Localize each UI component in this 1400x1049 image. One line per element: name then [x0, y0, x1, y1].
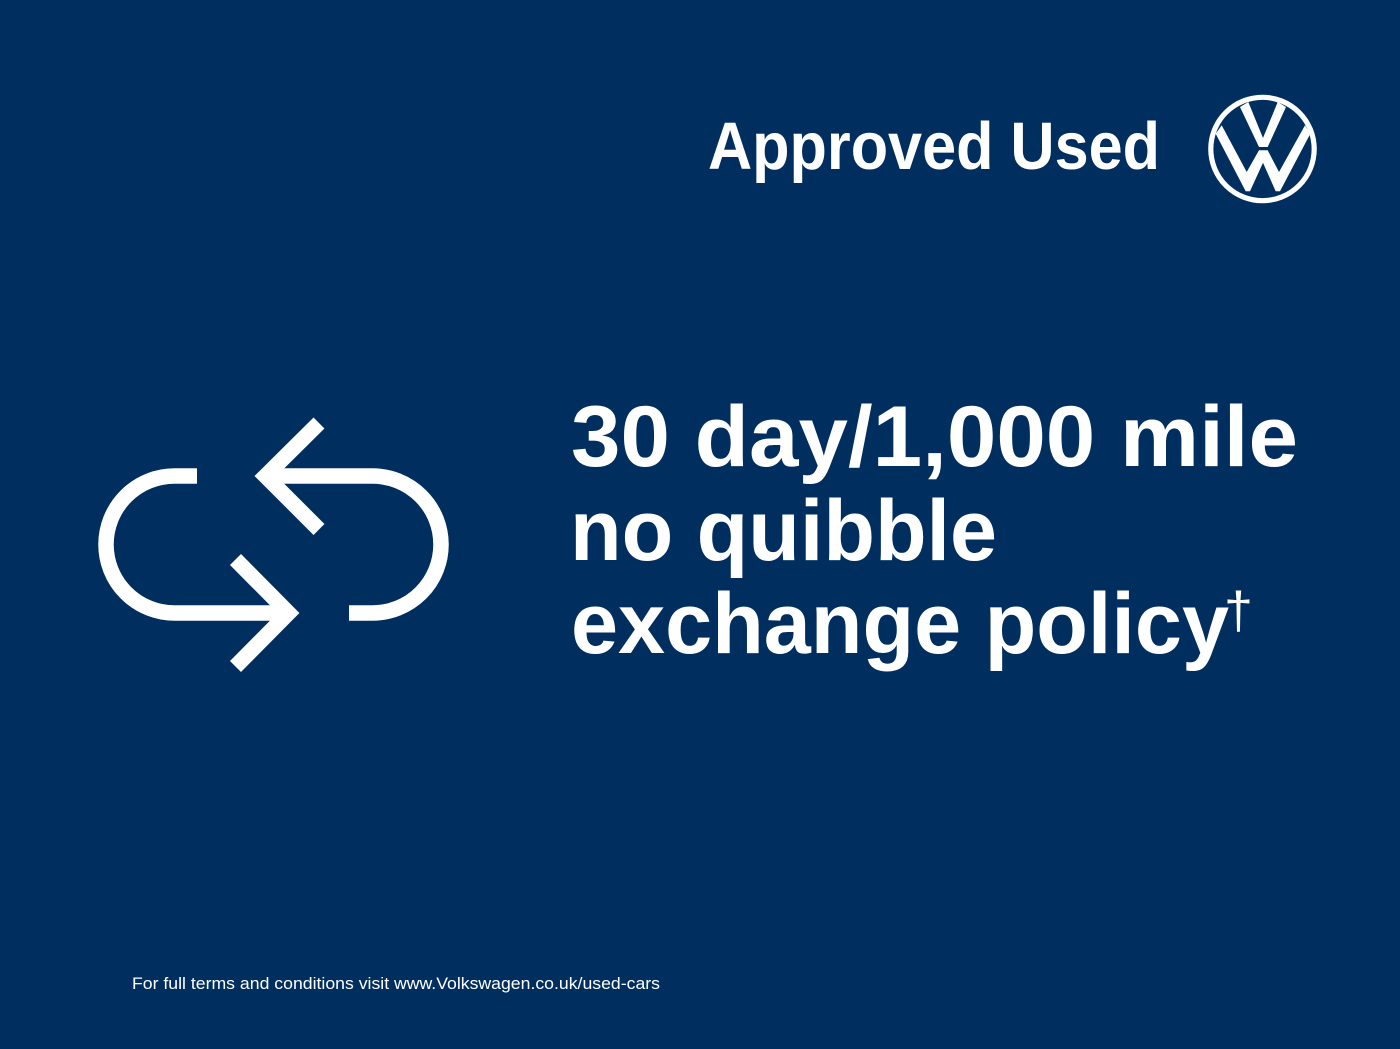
headline: exchange policy: exchange policy — [571, 576, 1229, 672]
headline: exchange policy: 30 day/1,000 mile — [571, 389, 1298, 485]
icon: Volkswagen logo — [1211, 97, 1314, 201]
arrow: lower left looping right — [106, 476, 288, 666]
brand heading: Approved Used: Approved Used — [708, 109, 1160, 184]
arrow: upper right looping left — [265, 423, 441, 613]
icon: exchange arrows — [106, 423, 441, 666]
headline: exchange policy: no quibble — [570, 483, 997, 579]
dagger footnote mark: † — [1224, 582, 1253, 640]
footer: terms and conditions: For full terms and conditions visit www.Volkswagen.co.uk/used-cars — [132, 974, 660, 993]
headline: exchange policy — [570, 389, 1298, 672]
